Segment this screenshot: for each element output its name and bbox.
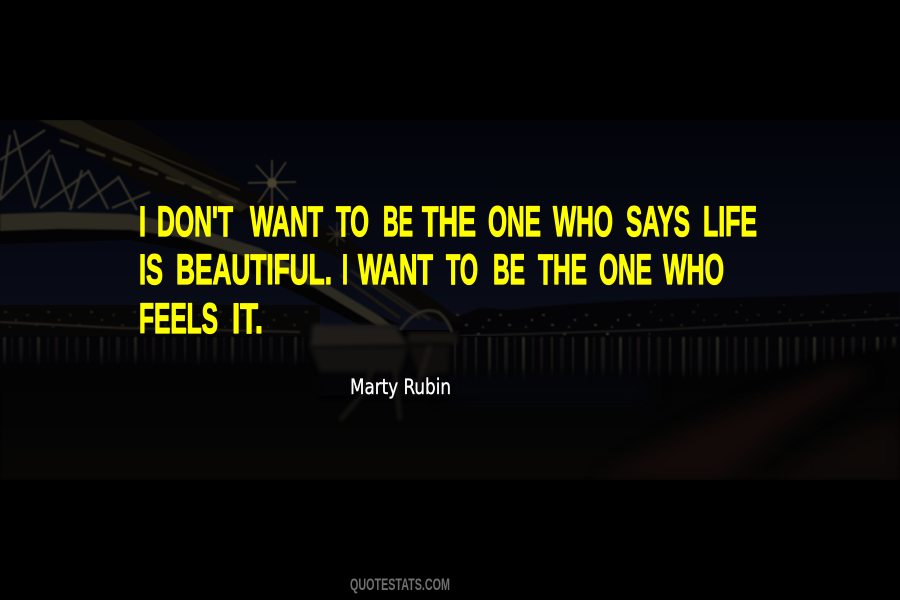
line 1: DON'T [157,198,233,246]
line 2: IS [139,246,163,294]
line 3: IT. [232,295,263,343]
water reflections [2,336,896,375]
underside of the deck [0,226,400,325]
line 2: BE [493,246,525,294]
reddish path on the bank [644,372,850,472]
line 1: BE [383,198,413,246]
line 1: I [139,198,146,246]
icon: star burst light [248,160,296,207]
truss [0,130,150,210]
stone pier [310,324,408,347]
quote poster [0,120,900,594]
left dark bank [0,305,320,330]
line 1: LIFE [703,198,757,246]
line 1: WANT [250,198,323,246]
line 3: FEELS [139,295,218,343]
city lights [0,304,900,336]
line 2: THE [538,246,587,294]
line 2: TO [446,246,478,294]
line 1: SAYS [626,198,690,246]
small arch [400,310,452,332]
blue water patch [464,396,466,397]
line 1: THE [422,198,476,246]
quote text [139,198,757,343]
far hillside [450,292,900,330]
line 1 [139,198,757,246]
line 2: WANT [358,246,433,294]
line 2 [139,246,724,294]
far bridge structure [340,270,430,320]
upper deck [38,120,250,212]
bridge [0,120,465,420]
site watermark: QUOTESTATS.COM [350,575,450,594]
line 1: WHO [553,198,613,246]
author name: Marty Rubin [350,375,451,399]
background photo: night bridge over river [0,120,900,480]
line 2: BEAUTIFUL. [176,246,332,294]
line 1: ONE [488,198,541,246]
pier reflection [310,347,408,372]
icon: small star burst light [326,222,350,246]
line 2: ONE [599,246,652,294]
main arch [0,212,392,326]
line 1: TO [336,198,369,246]
night sky [0,120,900,330]
river water [460,336,492,337]
river bank foreground [717,346,896,378]
line 2: WHO [663,246,724,294]
line 2: I [342,246,348,294]
